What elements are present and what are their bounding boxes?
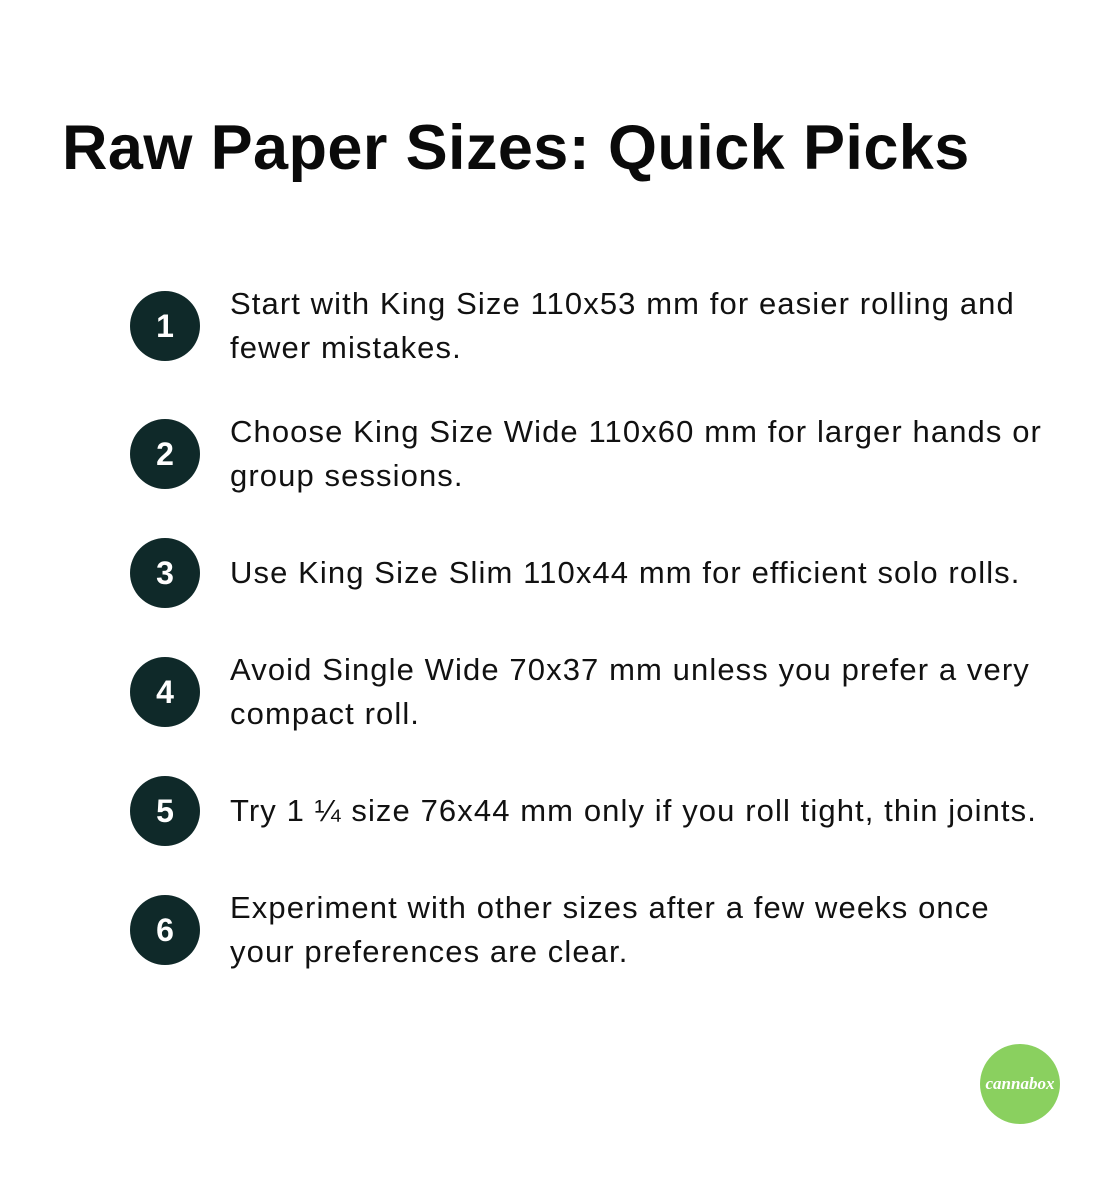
item 6 — [130, 890, 990, 969]
item 2: group sessions. — [230, 458, 464, 493]
item 4: compact roll. — [230, 696, 420, 731]
item 5: 5 — [156, 792, 174, 828]
item 3 — [130, 538, 1020, 608]
item 4: 4 — [156, 674, 174, 710]
item 5 — [130, 776, 1037, 846]
item 5: Try 1 ¼ size 76x44 mm only if you roll tight, thin joints. — [230, 793, 1037, 828]
item 1: Start with King Size 110x53 mm for easier rolling and — [230, 286, 1015, 321]
item 3: 3 — [156, 554, 174, 590]
item 2: Choose King Size Wide 110x60 mm for larger hands or — [230, 414, 1042, 449]
item 2: 2 — [156, 436, 174, 472]
item 3: Use King Size Slim 110x44 mm for efficient solo rolls. — [230, 555, 1020, 590]
item 1 — [130, 286, 1015, 365]
item 6: your preferences are clear. — [230, 934, 628, 969]
logo: cannabox — [980, 1044, 1060, 1124]
item 1: fewer mistakes. — [230, 330, 462, 365]
title: Raw Paper Sizes: Quick Picks — [62, 113, 970, 183]
item 1: 1 — [156, 308, 174, 344]
logo: cannabox: cannabox — [986, 1074, 1054, 1093]
item 6: 6 — [156, 912, 174, 948]
item 6: Experiment with other sizes after a few weeks once — [230, 890, 990, 925]
item 4: Avoid Single Wide 70x37 mm unless you prefer a very — [230, 652, 1030, 687]
item 2 — [130, 414, 1042, 493]
item 4 — [130, 652, 1030, 731]
